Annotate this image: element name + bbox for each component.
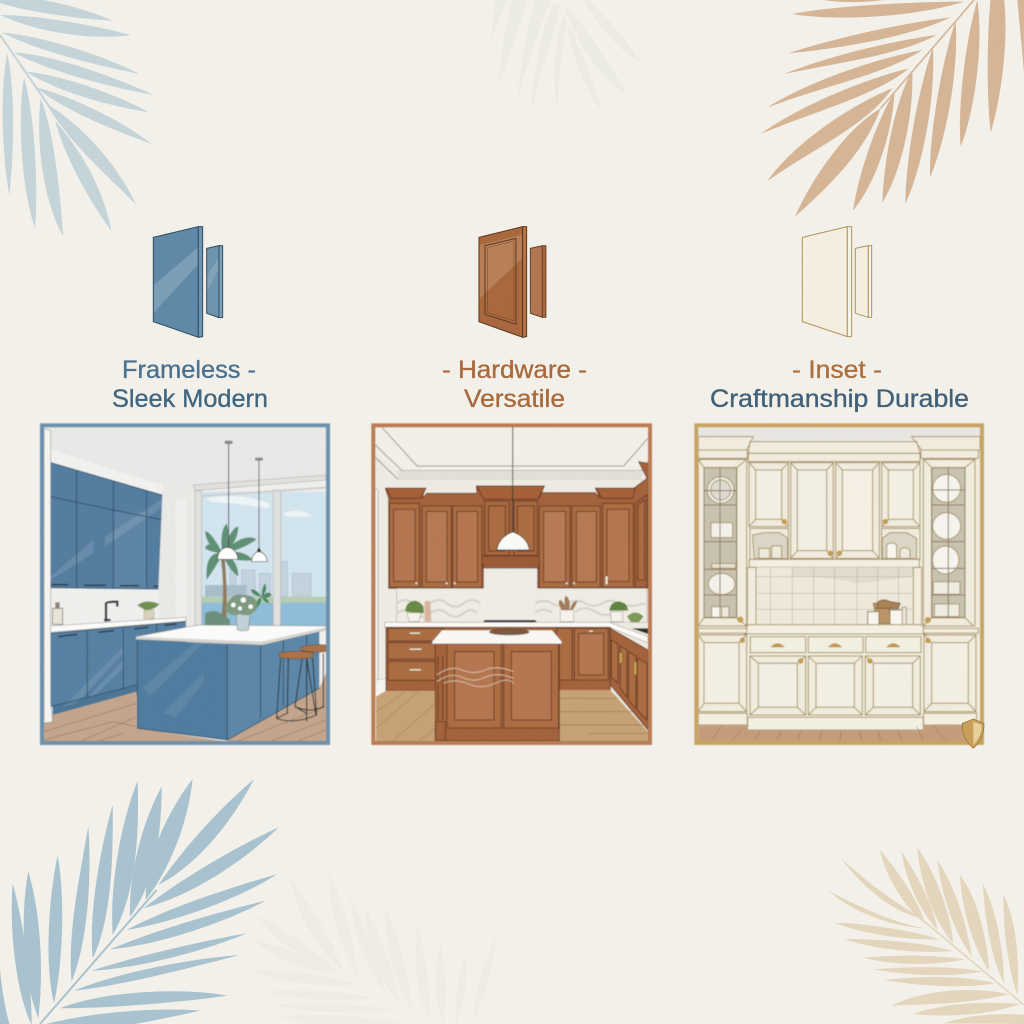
door icon: frameless blue xyxy=(153,227,223,337)
centre upper doors xyxy=(749,463,920,558)
palm frond: top left blue xyxy=(0,0,154,236)
crown tops xyxy=(698,437,980,462)
heading: hardware xyxy=(442,356,587,413)
counter xyxy=(744,625,926,634)
pendant lamp left xyxy=(217,441,238,559)
bar stools xyxy=(277,645,326,722)
open niches xyxy=(750,528,920,559)
side strip xyxy=(747,567,922,628)
heading: hardware: Versatile xyxy=(464,385,565,413)
island xyxy=(435,644,559,741)
ceiling and crown molding xyxy=(375,427,648,480)
base doors xyxy=(698,635,976,715)
panel: frameless kitchen xyxy=(40,423,330,745)
shelf xyxy=(749,559,919,567)
door icon: hardware brown xyxy=(479,227,546,337)
wall pillar xyxy=(158,494,176,590)
base cabinets xyxy=(386,627,648,730)
vase with flowers xyxy=(225,594,257,631)
heading: frameless: Sleek Modern xyxy=(112,385,268,413)
door icon: inset cream xyxy=(802,227,872,337)
island top xyxy=(432,629,562,644)
pendant lamp right xyxy=(251,458,267,562)
countertop items xyxy=(405,596,644,622)
base counter xyxy=(385,622,648,643)
decorative waves xyxy=(437,668,514,687)
plinth xyxy=(698,713,977,730)
cabinet knobs xyxy=(415,576,608,585)
left wall edge xyxy=(44,428,53,723)
palm frond: bottom left blue xyxy=(0,779,279,1024)
stove xyxy=(482,620,538,624)
upper right glass cabinet xyxy=(923,459,975,626)
palm tree xyxy=(221,557,227,617)
pendant lamp xyxy=(497,427,529,550)
panel: inset kitchen xyxy=(694,423,984,748)
palm frond: bottom right sand xyxy=(828,847,1024,1024)
base counter xyxy=(51,617,186,632)
icon: durability shield xyxy=(962,719,984,748)
left wall door casing xyxy=(375,488,378,698)
upper cabinets xyxy=(51,463,176,589)
brass knobs xyxy=(738,519,931,663)
heading: inset: Craftmanship Durable xyxy=(710,385,969,413)
heading: inset xyxy=(710,356,969,413)
upper wall xyxy=(51,449,162,590)
ceiling xyxy=(44,427,326,485)
base drawers xyxy=(750,637,921,653)
base cabinets xyxy=(51,622,186,715)
backsplash xyxy=(397,568,647,622)
floor xyxy=(44,673,326,742)
palm frond: top right tan xyxy=(761,0,1024,217)
backsplash items xyxy=(53,601,159,624)
window frame xyxy=(193,475,326,627)
window view xyxy=(202,492,326,627)
island xyxy=(136,625,326,740)
faint palm frond: top centre xyxy=(491,0,640,110)
tile backsplash xyxy=(756,567,913,625)
cup pulls xyxy=(771,643,900,647)
floor xyxy=(698,726,980,742)
faint palm frond: bottom centre xyxy=(248,872,497,1024)
floor xyxy=(376,690,648,742)
cabinet pulls xyxy=(409,630,637,675)
upper left glass cabinet xyxy=(698,459,747,626)
upper cabinets xyxy=(385,462,648,588)
heading: frameless: Frameless - xyxy=(122,356,256,384)
heading: inset: - Inset - xyxy=(792,356,882,384)
canisters xyxy=(852,600,906,628)
back wall xyxy=(700,428,978,440)
panel: hardware kitchen xyxy=(371,423,652,745)
heading: hardware: - Hardware - xyxy=(442,356,587,384)
heading: frameless xyxy=(112,356,268,413)
